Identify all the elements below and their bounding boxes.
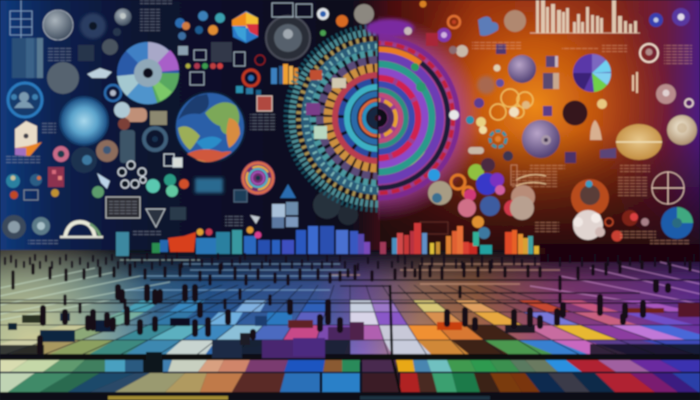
brownish clump <box>477 76 495 94</box>
text block <box>28 238 58 245</box>
text block <box>225 214 243 226</box>
cream sphere <box>667 115 697 145</box>
text lines <box>618 176 648 198</box>
panel: right data collage <box>404 0 697 217</box>
orange ring <box>448 16 460 28</box>
colour cube <box>232 11 258 43</box>
sphere <box>428 181 452 205</box>
glowing sphere <box>60 97 108 145</box>
colour tiles: bottom row one <box>0 360 700 372</box>
floor stripes <box>0 260 700 320</box>
hazy sphere <box>80 13 106 39</box>
dark front shade <box>0 340 700 358</box>
icon row dots <box>186 63 223 69</box>
text block <box>133 231 161 237</box>
teal hexagons <box>146 174 189 197</box>
bar chart <box>536 0 637 33</box>
top-centre sphere <box>354 4 374 24</box>
orange orb <box>336 15 348 27</box>
pale orb <box>404 27 412 35</box>
text block <box>78 45 94 61</box>
sphere cluster <box>175 11 225 40</box>
golden bubble cluster <box>490 89 533 120</box>
capsule <box>468 147 484 154</box>
dial <box>32 217 50 235</box>
small ring <box>685 99 693 107</box>
photo tile <box>257 96 272 111</box>
text block <box>511 165 517 185</box>
blue orchid <box>478 16 498 36</box>
crosshair circle <box>652 172 684 204</box>
moon sphere <box>43 10 73 40</box>
cluster <box>622 210 649 226</box>
figure on tiles <box>143 360 163 373</box>
pale glow orb <box>597 99 607 109</box>
ring gear <box>490 131 506 147</box>
lavender sphere <box>508 55 536 83</box>
sphere cluster <box>432 193 520 239</box>
tiles: far row <box>120 300 694 312</box>
photo tile <box>150 111 167 125</box>
panel tile <box>234 190 247 202</box>
dark shadow band under right skyline <box>540 244 700 262</box>
text block <box>250 112 276 132</box>
colourful blob cluster <box>451 158 505 201</box>
raised blocks <box>8 303 700 370</box>
violet cube <box>543 106 552 116</box>
mosaic cubes <box>306 70 346 139</box>
icon tiles <box>272 202 298 228</box>
swoosh icon <box>97 173 110 189</box>
dark sphere <box>562 100 588 126</box>
bar chart: right skyline <box>350 223 545 254</box>
donut chart <box>117 42 179 104</box>
tiles: mid row <box>91 312 695 325</box>
people icon ring <box>8 83 42 117</box>
text block <box>420 222 448 234</box>
tile glyphs <box>164 154 182 167</box>
pink sphere <box>53 146 69 162</box>
panel: swirl left half <box>282 24 380 214</box>
blue ring orb <box>649 13 663 27</box>
brown sphere <box>96 140 118 162</box>
ring orb <box>605 218 622 242</box>
triangle badge <box>146 209 165 227</box>
text block <box>140 0 172 5</box>
shell cluster <box>449 45 468 57</box>
text block <box>664 45 692 65</box>
text block <box>620 230 656 238</box>
teal fan icon <box>280 184 296 198</box>
upper background <box>0 0 700 260</box>
crowd: near figures <box>40 282 668 352</box>
teal tiles <box>236 86 261 95</box>
swirl dividing line <box>377 33 379 175</box>
blue sphere <box>71 147 97 173</box>
purple haze <box>366 19 414 37</box>
base strip <box>0 392 700 400</box>
text block <box>140 8 160 33</box>
white cloud sphere <box>573 210 605 240</box>
tile <box>178 46 188 55</box>
red square <box>426 33 438 46</box>
grey moon <box>47 62 79 94</box>
gauge column <box>120 130 135 163</box>
blue data panel <box>12 38 43 78</box>
chart panel <box>512 170 557 188</box>
screen panel <box>106 197 140 218</box>
text block <box>48 46 72 62</box>
shield icon <box>15 121 42 156</box>
dark orb <box>503 151 513 161</box>
violet gear <box>672 8 690 26</box>
red ring icon <box>243 55 265 86</box>
purple ring orb <box>437 28 451 42</box>
pale orbs <box>466 64 530 134</box>
grid table <box>10 0 32 38</box>
text block <box>530 163 565 169</box>
text block <box>211 42 232 62</box>
floor base <box>0 250 700 362</box>
ring icon <box>640 44 658 62</box>
text block <box>562 46 598 51</box>
golden ellipse planet <box>616 124 662 160</box>
violet cube <box>496 44 506 54</box>
violet cluster <box>600 148 616 158</box>
gray sphere <box>102 39 118 55</box>
text block <box>472 42 522 50</box>
dark dial sphere <box>266 16 310 60</box>
panel: lower-right items <box>420 193 693 245</box>
badge <box>2 215 26 239</box>
sphere <box>510 196 534 220</box>
grid lines <box>0 284 700 356</box>
small badge <box>30 174 42 186</box>
hazy teal panel <box>195 178 223 193</box>
crowd: far figures <box>5 253 694 270</box>
small sphere <box>113 28 121 36</box>
textured sphere <box>504 10 526 32</box>
floor rails <box>0 280 700 303</box>
tiles: front row <box>0 340 700 355</box>
pie chart <box>573 54 611 92</box>
text block <box>650 240 690 245</box>
node network <box>118 161 146 188</box>
panel: lower-left icon row <box>2 191 358 245</box>
earth globe <box>175 92 245 162</box>
rocket icon <box>87 68 112 78</box>
blue orb <box>317 8 329 20</box>
text block <box>42 122 56 134</box>
swirl beads <box>411 63 459 181</box>
lower icon row <box>10 189 59 200</box>
text block <box>535 222 559 234</box>
small badge <box>6 174 20 188</box>
spiky icon <box>250 215 260 224</box>
lavender large sphere <box>522 120 560 158</box>
ring sphere <box>656 84 676 104</box>
sphere <box>511 185 535 209</box>
purple cube <box>565 152 576 163</box>
cube <box>543 73 559 89</box>
text block <box>5 155 40 164</box>
molecule sphere <box>571 179 609 217</box>
swirl: outer haze <box>376 14 482 221</box>
gear dial <box>144 128 166 150</box>
cube <box>546 56 558 67</box>
tiles: near row <box>14 325 700 340</box>
green orb <box>320 30 326 36</box>
arch icon <box>60 222 103 237</box>
crowd: mid figures <box>13 262 690 312</box>
text block <box>170 207 186 220</box>
teal donut <box>661 207 693 239</box>
text block <box>620 163 650 173</box>
floor tile grid <box>0 284 700 356</box>
mini bars <box>632 72 638 93</box>
small orange orb <box>420 0 426 8</box>
panel: left data collage <box>5 0 348 202</box>
small sphere <box>114 8 132 26</box>
mini bar chart <box>271 64 298 84</box>
dark front edge <box>0 354 700 362</box>
small sphere <box>92 186 104 198</box>
bubble cluster <box>114 102 130 130</box>
colour blocks <box>48 167 64 187</box>
chart axis <box>530 32 640 34</box>
gear ring <box>105 85 121 101</box>
vertical rail <box>390 285 400 392</box>
panel: swirl right half <box>376 36 461 201</box>
outline icons <box>190 3 312 85</box>
bar chart: left skyline <box>116 226 348 256</box>
colour tiles: bottom row two <box>0 373 700 392</box>
badge <box>125 108 147 122</box>
hazy dark spheres <box>313 191 358 225</box>
pale figure <box>590 120 602 140</box>
text block <box>602 45 627 53</box>
rainbow spiral <box>241 161 275 195</box>
